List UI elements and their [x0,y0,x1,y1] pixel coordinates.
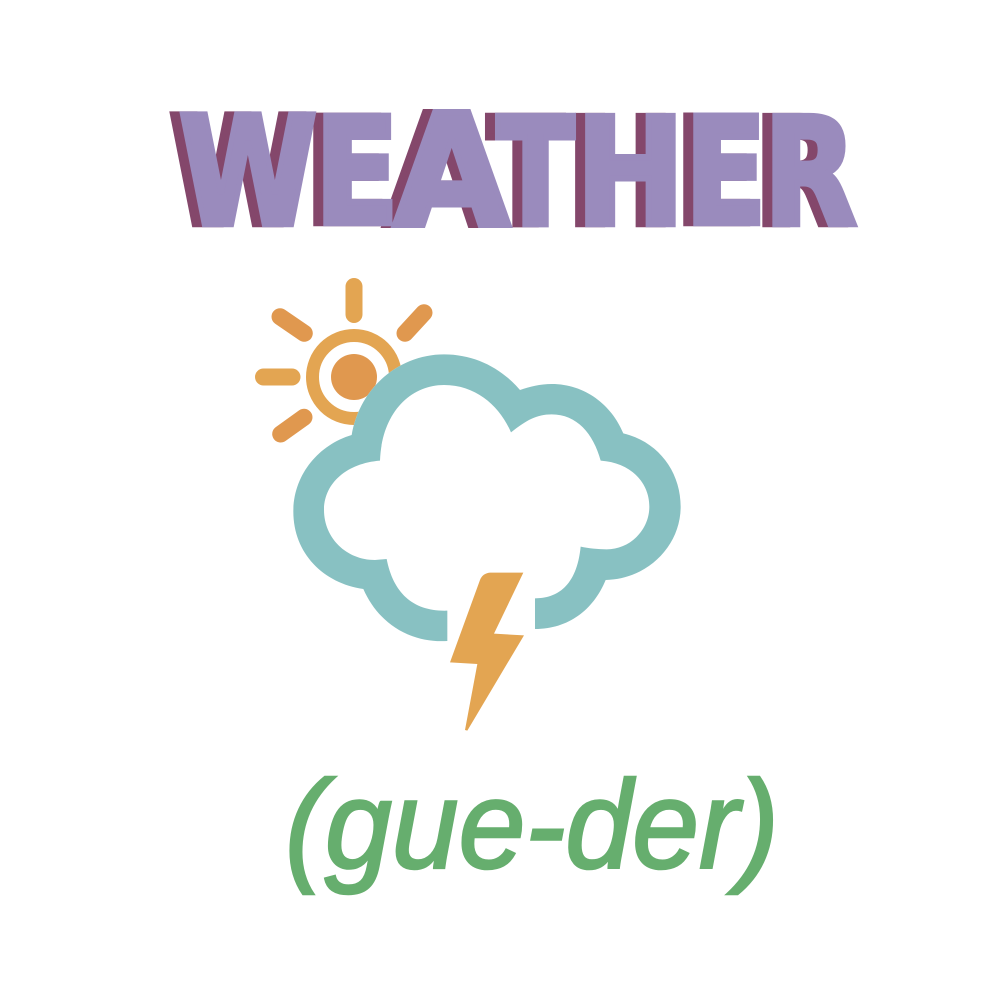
icon: sun [264,286,424,434]
title shadow layer: A [384,81,499,262]
title face layer: T [497,88,574,260]
title: WEATHER [169,81,856,262]
icon: lightning bolt [450,573,524,731]
title face layer: H [576,87,685,259]
subtitle: pronunciation: (gue-der) [285,756,779,895]
title shadow layer: E [675,87,756,258]
title shadow layer: R [754,87,846,259]
title face layer: R [764,87,856,259]
title shadow layer: T [487,88,564,260]
title face layer: A [394,81,509,262]
title shadow layer: W [169,85,307,260]
title shadow layer: E [305,86,389,258]
icon: cloud [293,354,681,641]
title shadow layer: H [566,87,675,259]
title face layer: W [179,85,317,260]
title face layer [179,81,856,262]
title face layer: E [315,86,399,258]
title shadow layer [169,81,846,262]
title face layer: E [685,87,766,258]
